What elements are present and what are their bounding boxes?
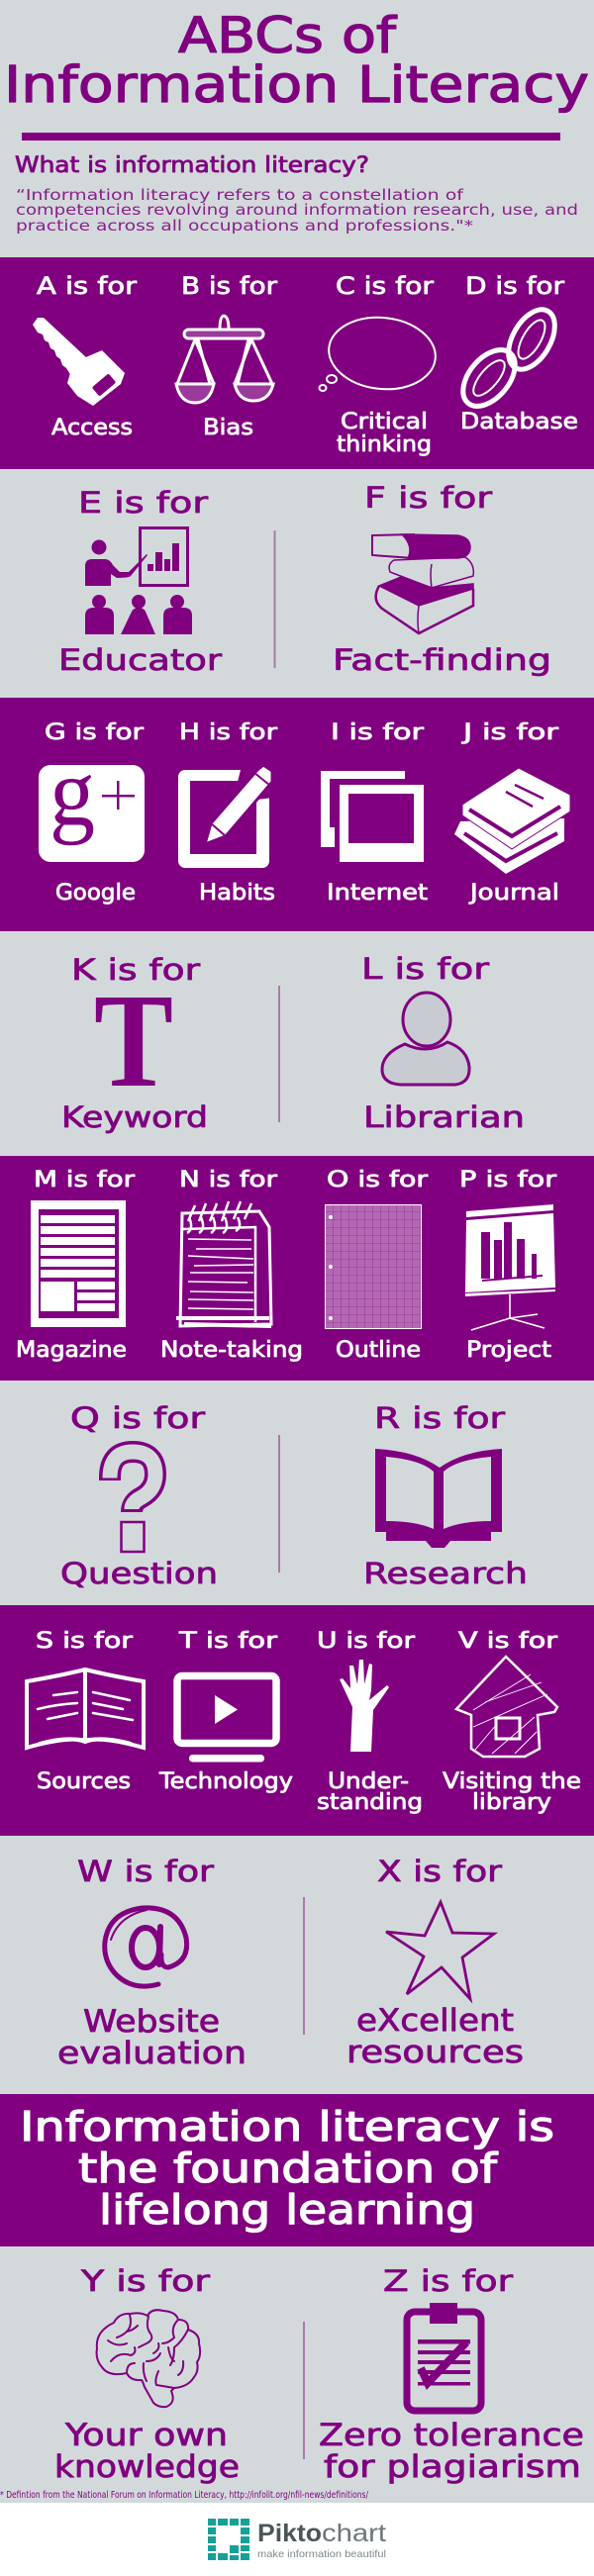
- cell: Z: [319, 2264, 584, 2485]
- cell: U: U is for: [317, 1629, 416, 1654]
- cell: R: [363, 1401, 528, 1590]
- cell: O: [325, 1168, 429, 1363]
- cell: V: V is for: [458, 1629, 558, 1654]
- piktochart wordmark: Pikto: [257, 2520, 322, 2547]
- icon: at sign: [105, 1908, 187, 1986]
- cell: I: Internet: [327, 881, 428, 906]
- cell: R: Research: [363, 1557, 528, 1590]
- cell: J: [454, 720, 570, 906]
- closing text: Information literacy is: [20, 2103, 554, 2150]
- cell: A: [33, 272, 137, 440]
- definition quote: competencies revolving around information research, use, and: [16, 201, 578, 219]
- cell: N: N is for: [179, 1168, 278, 1193]
- icon: librarian: [382, 993, 469, 1085]
- cell: M: M is for: [34, 1168, 136, 1193]
- panel: Q and R: [0, 1381, 594, 1605]
- icon: chain: [452, 302, 564, 416]
- icon: open book with lines: [27, 1670, 144, 1748]
- panel: K and L: [0, 931, 594, 1156]
- cell: V: library: [472, 1790, 551, 1815]
- cell: Q: Question: [60, 1557, 218, 1590]
- cell: U: Under-: [328, 1769, 409, 1794]
- panel: S to V: [0, 1605, 594, 1836]
- definition quote: [16, 186, 578, 235]
- cell: R: R is for: [374, 1401, 505, 1435]
- cell: W: W is for: [77, 1855, 214, 1888]
- icon: books: [372, 534, 473, 633]
- panel: Y and Z: [0, 2246, 594, 2503]
- cell: H: H is for: [179, 720, 278, 745]
- cell: L: L is for: [361, 952, 489, 986]
- cell: B: Bias: [203, 416, 253, 440]
- panel: footer: [0, 2503, 594, 2576]
- cell: F: Fact-finding: [333, 643, 551, 677]
- icon: question mark: [110, 1452, 155, 1552]
- icon: piktochart logo: [208, 2519, 249, 2560]
- cell: G: Google: [55, 881, 136, 906]
- cell: E: Educator: [58, 643, 222, 677]
- icon: open book: [375, 1449, 502, 1548]
- panel: M to P: [0, 1156, 594, 1381]
- cell: S: Sources: [37, 1769, 131, 1794]
- cell: F: [333, 481, 551, 677]
- icon: notepad: [176, 1201, 271, 1326]
- icon: brain: [97, 2310, 200, 2407]
- cell: O: Outline: [336, 1338, 421, 1363]
- cell: X: eXcellent: [356, 2003, 514, 2039]
- cell: H: [178, 720, 282, 906]
- closing text: the foundation of: [78, 2145, 499, 2192]
- closing text: lifelong learning: [99, 2186, 475, 2234]
- cell: Y: [54, 2264, 240, 2485]
- cell: K: [61, 953, 208, 1134]
- definition quote: “Information literacy refers to a constellation of: [16, 186, 464, 204]
- cell: Y: Your own: [64, 2418, 228, 2453]
- cell: U: standing: [317, 1790, 423, 1815]
- icon: letter T: T: [94, 967, 173, 1115]
- icon: star: [386, 1902, 494, 1999]
- panel: E and F: [0, 469, 594, 698]
- cell: J: J is for: [460, 720, 559, 745]
- cell: C: [319, 272, 439, 457]
- cell: P: [459, 1168, 557, 1363]
- cell: B: [176, 272, 277, 440]
- icon: graph paper: [325, 1205, 422, 1328]
- cell: T: T is for: [178, 1629, 278, 1654]
- cell: H: Habits: [199, 881, 275, 906]
- icon: house: [456, 1657, 557, 1757]
- cell: Z: Zero tolerance: [319, 2418, 584, 2453]
- icon: presentation board: [465, 1204, 555, 1330]
- cell: M: [16, 1168, 136, 1363]
- piktochart wordmark: [257, 2520, 386, 2560]
- cell: Q: [60, 1401, 218, 1590]
- icon: raised hand: [340, 1660, 389, 1752]
- cell: Z: for plagiarism: [324, 2449, 581, 2485]
- cell: N: Note-taking: [160, 1338, 303, 1363]
- cell: T: [158, 1629, 293, 1794]
- panel: header: [0, 0, 594, 257]
- title rule: [22, 133, 560, 141]
- piktochart wordmark: chart: [322, 2520, 386, 2547]
- cell: Z: Z is for: [383, 2264, 513, 2298]
- cell: B: B is for: [181, 272, 277, 300]
- icon: pencil and pad: [178, 762, 282, 868]
- title: ABCs of: [178, 7, 398, 64]
- panel: A to D: [0, 257, 594, 469]
- icon: video monitor: [177, 1676, 276, 1762]
- cell: U: [317, 1629, 423, 1815]
- cell: Q: Q is for: [70, 1401, 205, 1435]
- cell: F: F is for: [364, 481, 492, 515]
- panel: W and X: [0, 1836, 594, 2094]
- cell: X: resources: [346, 2035, 524, 2070]
- cell: G: [39, 720, 145, 906]
- panel: closing statement: [0, 2094, 594, 2246]
- cell: C: C is for: [336, 272, 434, 300]
- icon: google plus: [39, 739, 145, 862]
- cell: M: Magazine: [16, 1338, 127, 1363]
- cell: I: I is for: [331, 720, 425, 745]
- cell: Y: Y is for: [80, 2264, 210, 2298]
- cell: D: [452, 272, 578, 434]
- cell: A: Access: [51, 416, 133, 440]
- cell: C: Critical: [341, 410, 428, 434]
- icon: google plus: g: [50, 739, 95, 846]
- title: [4, 7, 589, 115]
- piktochart wordmark: make information beautiful: [257, 2548, 386, 2560]
- icon: overlapping frames: [321, 771, 424, 862]
- cell: D: Database: [460, 410, 578, 434]
- cell: S: [27, 1629, 144, 1794]
- cell: V: [443, 1629, 581, 1815]
- cell: L: [361, 952, 525, 1134]
- cell: S: S is for: [36, 1629, 134, 1654]
- closing text: [20, 2103, 554, 2234]
- cell: I: [321, 720, 428, 906]
- title: Information Literacy: [4, 56, 589, 115]
- icon: scales: [176, 316, 273, 403]
- subheading: What is information literacy?: [15, 153, 369, 178]
- icon: magazine: [31, 1200, 126, 1327]
- cell: C: thinking: [337, 432, 432, 457]
- panel: G to J: [0, 698, 594, 931]
- cell: W: [57, 1855, 247, 2071]
- cell: P: P is for: [459, 1168, 557, 1193]
- cell: P: Project: [466, 1338, 551, 1363]
- cell: O: O is for: [327, 1168, 429, 1193]
- cell: E: E is for: [78, 486, 208, 520]
- cell: N: [160, 1168, 303, 1363]
- cell: X: X is for: [377, 1855, 502, 1888]
- cell: K: K is for: [71, 953, 200, 987]
- cell: K: Keyword: [61, 1100, 208, 1134]
- icon: stacked journals: [454, 768, 570, 874]
- icon: clipboard: [407, 2303, 481, 2411]
- definition quote: practice across all occupations and professions."*: [16, 217, 474, 235]
- icon: key: [33, 318, 125, 406]
- cell: T: Technology: [158, 1769, 293, 1794]
- footnote: * Defintion from the National Forum on Information Literacy, http://infolit.org/nfil-news/definitions/: [0, 2490, 369, 2501]
- cell: G: G is for: [45, 720, 145, 745]
- cell: A: A is for: [37, 272, 137, 300]
- cell: W: Website: [83, 2004, 220, 2040]
- icon: educator: [85, 528, 192, 634]
- cell: D: D is for: [465, 272, 564, 300]
- cell: L: Librarian: [363, 1100, 525, 1134]
- cell: X: [346, 1855, 524, 2070]
- cell: W: evaluation: [57, 2036, 247, 2071]
- cell: J: Journal: [468, 881, 559, 906]
- cell: Y: knowledge: [54, 2449, 240, 2485]
- cell: E: [58, 486, 222, 677]
- icon: thought bubble: [319, 313, 439, 394]
- cell: V: Visiting the: [443, 1769, 581, 1794]
